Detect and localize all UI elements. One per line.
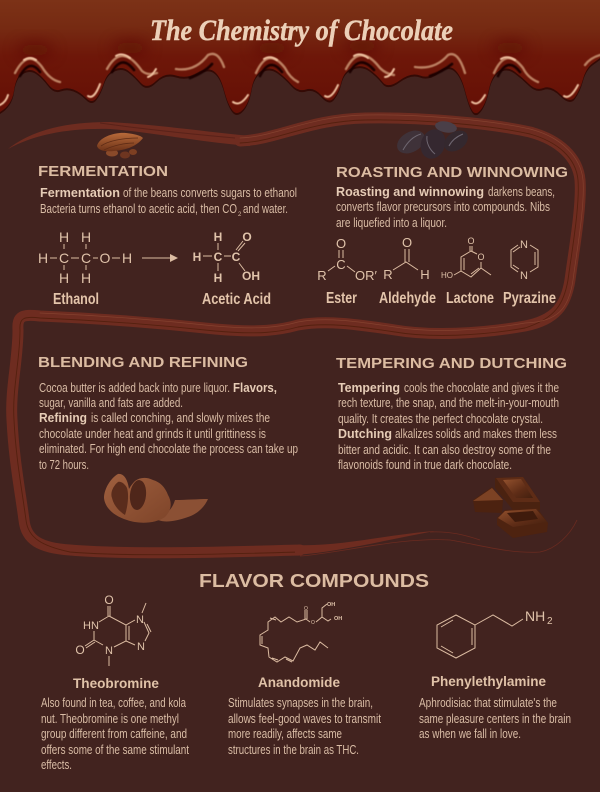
text: anandomide body: more readily, affects same <box>228 727 342 741</box>
diagram: ethanol: H <box>38 250 48 266</box>
diagram: pyrazine <box>511 239 538 282</box>
text: theobromine body: group different from caffeine, and <box>41 727 187 741</box>
icon: roasted beans <box>393 120 472 162</box>
diagram: ethanol: H <box>59 270 69 286</box>
text: tempering body: quality. It creates the perfect chocolate crystal. <box>338 412 543 426</box>
text: blending body: to 72 hours. <box>39 458 89 472</box>
diagram: theobromine: N <box>105 645 113 657</box>
diagram: aldehyde: R <box>383 267 393 282</box>
text: blending body: sugar, vanilla and fats are added. <box>39 396 183 410</box>
diagram: ethanol: H <box>81 229 91 245</box>
text: tempering body: flavonoids found in true dark chocolate. <box>338 458 512 472</box>
text: tempering body: cools the chocolate and gives it the <box>404 381 559 395</box>
panel: theobromine <box>41 593 189 772</box>
diagram: anandomide: OH <box>327 602 335 608</box>
diagram: ethanol: C <box>81 250 91 266</box>
diagram: anandomide: O <box>311 620 315 626</box>
text: fermentation body: of the beans converts sugars to ethanol <box>123 186 297 200</box>
heading: roasting and winnowing: ROASTING AND WINNOWING <box>336 165 568 181</box>
text: tempering body <box>338 381 559 472</box>
diagram: lactone: O <box>477 252 485 262</box>
diagram: pyrazine: N <box>520 270 528 282</box>
label: ethanol: Ethanol <box>53 291 99 308</box>
diagram: aldehyde <box>383 235 430 282</box>
text: blending body: Refining <box>39 411 87 425</box>
panel: fermentation <box>38 133 297 308</box>
diagram: acetic acid <box>193 230 260 285</box>
text: blending body: is called conching, and slowly mixes the <box>91 411 270 425</box>
diagram: aldehyde: O <box>402 235 412 250</box>
text: fermentation body <box>40 186 297 218</box>
diagram: anandomide <box>260 602 342 662</box>
text: theobromine body <box>41 696 189 772</box>
diagram: phenylethylamine: 2 <box>547 616 553 627</box>
diagram: acetic acid: H <box>214 271 222 285</box>
diagram: ester: C <box>336 257 346 272</box>
diagram: ethanol: O <box>100 250 111 266</box>
text: roasting body: Roasting and winnowing <box>336 185 484 199</box>
text: tempering body: Tempering <box>338 381 400 395</box>
text: roasting body: darkens beans, <box>488 185 555 199</box>
diagram: ester <box>317 236 378 283</box>
text: anandomide body <box>228 696 381 757</box>
text: anandomide body: allows feel-good waves to transmit <box>228 712 381 726</box>
diagram: theobromine: N <box>136 614 144 626</box>
diagram: acetic acid: H <box>214 230 222 244</box>
diagram: theobromine: HN <box>83 620 99 632</box>
diagram: ethanol: H <box>122 250 132 266</box>
diagram: theobromine: O <box>104 593 114 607</box>
text: tempering body: Dutching <box>338 427 392 441</box>
text: roasting body: are liquefied into a liquor. <box>336 216 447 230</box>
diagram: ethanol: C <box>59 250 69 266</box>
text: blending body: Cocoa butter is added back into pure liquor. <box>39 381 230 395</box>
label: lactone: Lactone <box>446 290 494 307</box>
text: theobromine body: offers some of the same stimulant <box>41 743 189 757</box>
diagram: anandomide: O <box>304 606 308 612</box>
heading: flavor compounds: FLAVOR COMPOUNDS <box>199 571 429 591</box>
diagram: acetic acid: OH <box>242 269 260 283</box>
diagram: lactone: O <box>467 236 475 246</box>
chocolate drip header <box>0 0 600 115</box>
diagram: lactone <box>441 236 491 280</box>
diagram: anandomide: OH <box>334 616 342 622</box>
text: blending body: chocolate under heat and grinds it until grittiness is <box>39 427 266 441</box>
heading: fermentation: FERMENTATION <box>38 164 168 180</box>
text: roasting body <box>336 185 555 230</box>
diagram: phenylethylamine <box>437 608 553 658</box>
text: tempering body: alkalizes solids and makes them less <box>395 427 557 441</box>
text: theobromine body: Also found in tea, coffee, and kola <box>41 696 186 710</box>
text: fermentation body: Bacteria turns ethanol to acetic acid, then CO <box>40 202 237 216</box>
text: roasting body: converts flavor precursors into compounds. Nibs <box>336 200 550 214</box>
label: acetic acid: Acetic Acid <box>202 291 271 308</box>
text: blending body: eliminated. For high end chocolate the process can take up <box>39 442 298 456</box>
panel: tempering and dutching <box>336 356 567 538</box>
diagram: aldehyde: H <box>420 267 430 282</box>
diagram: acetic acid: C <box>214 250 223 264</box>
text: fermentation body: Fermentation <box>40 186 120 200</box>
heading: blending and refining: BLENDING AND REFINING <box>38 355 248 371</box>
text: blending body: Flavors, <box>233 381 277 395</box>
diagram: ester: R <box>317 268 327 283</box>
diagram: ester: OR′ <box>355 268 378 283</box>
diagram: theobromine: O <box>75 643 85 657</box>
diagram: ester: O <box>336 236 346 251</box>
panel: roasting and winnowing <box>317 120 568 307</box>
text: anandomide body: structures in the brain as THC. <box>228 743 359 757</box>
diagram: theobromine <box>75 593 151 666</box>
icon: chocolate pieces <box>473 477 548 538</box>
text: theobromine body: nut. Theobromine is one methyl <box>41 712 179 726</box>
panel: phenylethylamine <box>419 608 571 741</box>
text: blending body <box>39 381 298 472</box>
diagram: ethanol <box>38 229 132 286</box>
label: pyrazine: Pyrazine <box>503 290 556 307</box>
diagram: theobromine: N <box>137 641 145 653</box>
chocolate ribbon frame <box>8 115 583 556</box>
diagram: lactone: HO <box>441 271 453 280</box>
label: aldehyde: Aldehyde <box>379 290 436 307</box>
diagram: acetic acid: C <box>232 250 241 264</box>
text: phenylethylamine body: Aphrodisiac that stimulate's the <box>419 696 557 710</box>
label: anandomide: Anandomide <box>258 675 340 690</box>
text: anandomide body: Stimulates synapses in the brain, <box>228 696 373 710</box>
diagram: pyrazine: N <box>520 239 528 251</box>
text: phenylethylamine body <box>419 696 571 741</box>
label: phenylethylamine: Phenylethylamine <box>431 674 546 689</box>
text: theobromine body: effects. <box>41 758 72 772</box>
label: theobromine: Theobromine <box>73 676 159 691</box>
arrow <box>142 254 178 262</box>
icon: chocolate curl <box>104 474 208 523</box>
text: tempering body: bitter and acidic. It can also destroy some of the <box>338 443 551 457</box>
diagram: ethanol: H <box>59 229 69 245</box>
panel: blending and refining <box>38 355 298 523</box>
text: fermentation body: and water. <box>243 202 288 216</box>
diagram: acetic acid: H <box>193 250 201 264</box>
title: The Chemistry of Chocolate <box>150 14 453 47</box>
diagram: ethanol: H <box>81 270 91 286</box>
heading: tempering and dutching: TEMPERING AND DUTCHING <box>336 356 567 372</box>
panel: anandomide <box>228 602 381 757</box>
diagram: acetic acid: O <box>242 230 252 244</box>
text: phenylethylamine body: as when we fall in love. <box>419 727 521 741</box>
diagram: phenylethylamine: NH <box>525 608 545 624</box>
text: fermentation body: 2 <box>238 212 242 218</box>
icon: cocoa pod <box>97 133 143 158</box>
label: ester: Ester <box>326 290 357 307</box>
